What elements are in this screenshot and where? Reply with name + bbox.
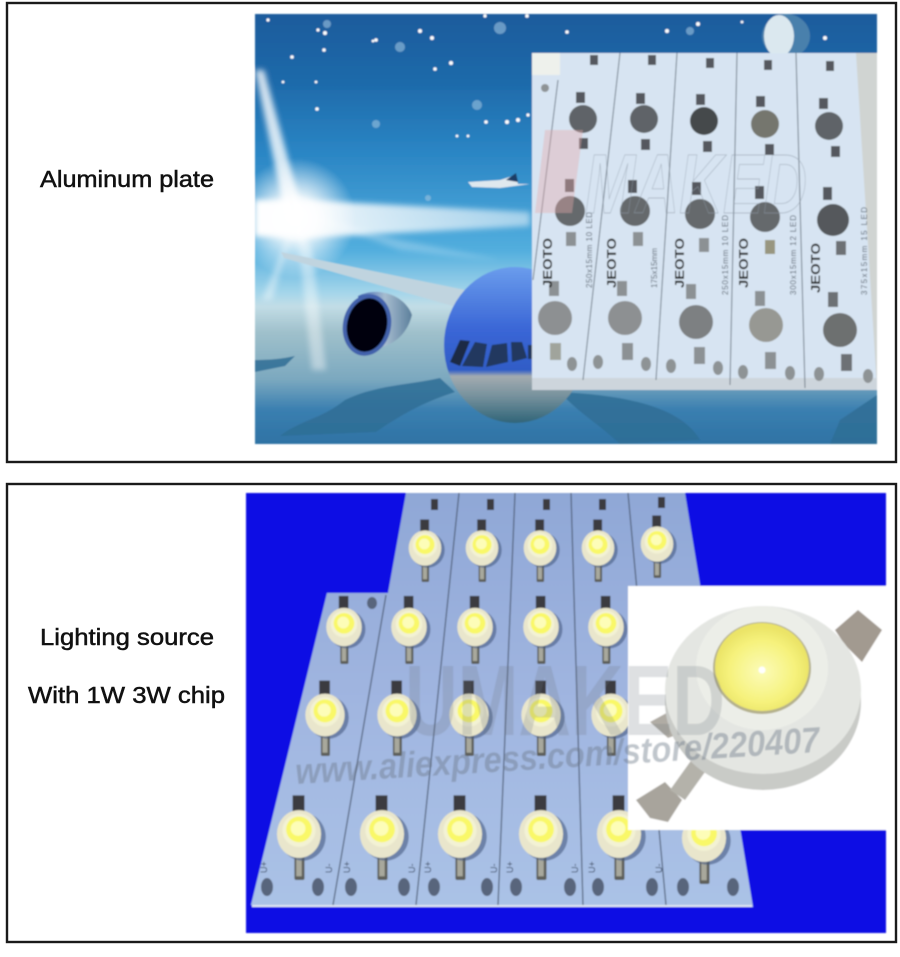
board polarity markings: U- (489, 864, 499, 873)
stars (266, 14, 827, 137)
photo: LED boards on blue (246, 493, 886, 933)
panel border (7, 3, 896, 462)
board polarity markings: U+ (259, 861, 269, 873)
watermark: UMAKED: MAKED (585, 137, 807, 231)
inset: aluminum boards: 300x15mm 12 LED (789, 215, 798, 295)
board polarity markings: U- (407, 864, 417, 873)
inset: aluminum boards (532, 53, 877, 390)
watermark: UMAKED (535, 130, 807, 231)
watermark: UMAKED and store URL: www.aliexpress.com/store/220407 (294, 719, 822, 792)
inset: single LED chip (628, 586, 886, 830)
land (255, 356, 877, 444)
aluminum boards (251, 493, 753, 907)
panel border (7, 484, 896, 942)
engine (337, 290, 412, 360)
board markings: JEOTO (808, 243, 823, 293)
fuselage (444, 267, 586, 423)
board polarity markings: U- (654, 864, 664, 873)
board polarity markings: U+ (423, 861, 433, 873)
board polarity markings: U- (570, 864, 580, 873)
board markings: JEOTO (672, 238, 687, 288)
board markings: JEOTO (540, 238, 555, 288)
board polarity markings: U- (324, 864, 334, 873)
inset: aluminum boards: 250x15mm 10 LED (721, 215, 730, 295)
label: chip wattage: With 1W 3W chip (28, 682, 225, 708)
label: aluminum plate: Aluminum plate (40, 166, 214, 192)
panel: aluminum plate (7, 3, 896, 462)
board polarity markings: U+ (505, 861, 515, 873)
board polarity markings: U+ (342, 861, 352, 873)
board polarity markings: U+ (587, 861, 597, 873)
panel: lighting source (7, 484, 896, 942)
board markings: JEOTO (736, 238, 751, 288)
sun glare (236, 158, 356, 278)
board polarity markings (259, 861, 664, 873)
wing (281, 252, 475, 309)
strip dividers (333, 493, 666, 905)
cut-off pads at board top (431, 497, 665, 510)
cockpit windows (450, 340, 534, 367)
inset: aluminum boards: 175x15mm (650, 248, 659, 288)
mounting holes (261, 597, 739, 896)
label: lighting source: Lighting source (40, 624, 214, 650)
photo: airplane in the sky (236, 14, 877, 444)
distant plane (468, 175, 530, 188)
watermark: UMAKED and store URL: UMAKED (405, 645, 725, 757)
inset: aluminum boards: 375x15mm 15 LED (860, 207, 869, 295)
LED rows (277, 515, 731, 884)
board markings (540, 238, 823, 293)
board markings: JEOTO (604, 238, 619, 288)
watermark: UMAKED and store URL (294, 645, 822, 792)
inset: aluminum boards: 250x15mm 10 LED (585, 212, 594, 288)
moon (762, 14, 810, 58)
